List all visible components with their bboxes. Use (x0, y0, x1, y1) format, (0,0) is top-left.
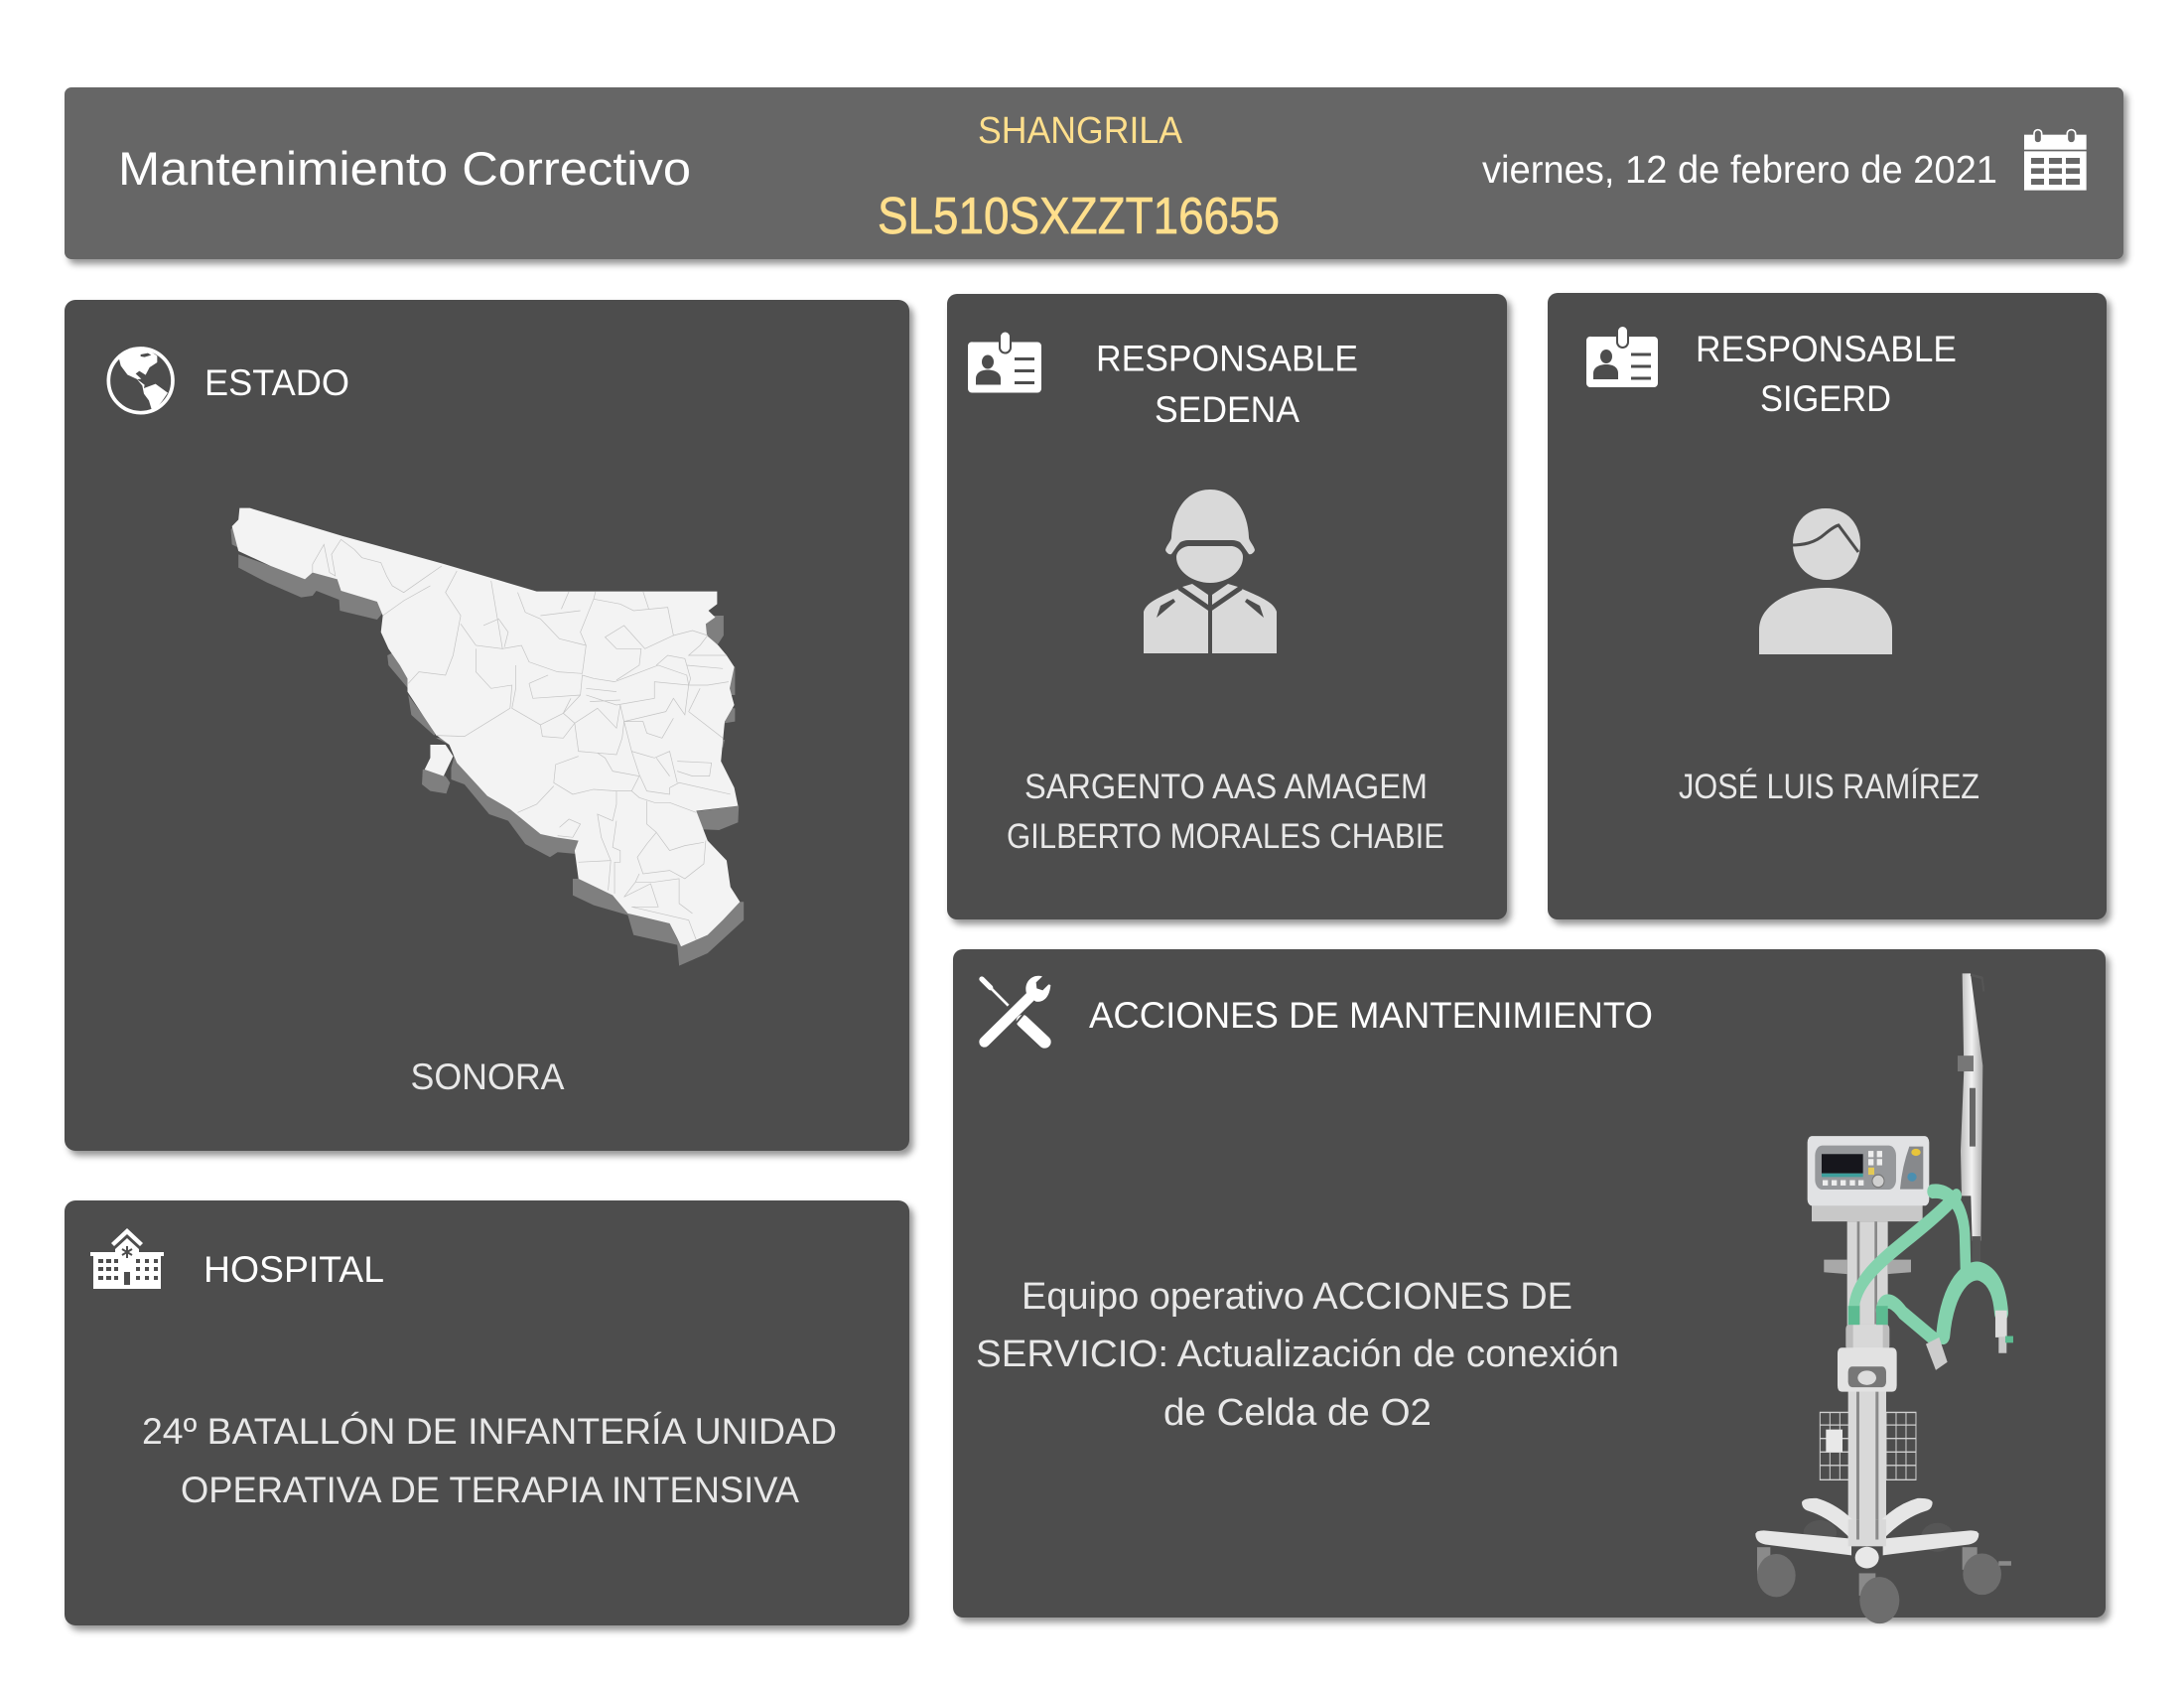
heading: responsable sedena: RESPONSABLE (1096, 338, 1358, 379)
municipal boundaries (313, 539, 731, 940)
text: maintenance description: de Celda de O2 (1163, 1392, 1432, 1434)
image: ventilator (1755, 973, 2013, 1623)
text: state name: SONORA (411, 1056, 565, 1097)
brand name: SHANGRILA (978, 110, 1183, 152)
hair line (1791, 525, 1858, 552)
text: maintenance description: Equipo operativo ACCIONES DE (1022, 1276, 1572, 1318)
icon: id badge (968, 332, 1041, 393)
head (1793, 508, 1860, 580)
text: maintenance description (976, 1276, 1619, 1434)
panel: responsable sigerd (1548, 293, 2107, 919)
title: Mantenimiento Correctivo (118, 142, 691, 195)
heading: responsable sigerd: RESPONSABLE (1696, 329, 1957, 369)
panel: hospital (65, 1200, 909, 1625)
map extruded shadow (231, 519, 744, 966)
icon: hospital building (90, 1228, 164, 1289)
icon: person (1759, 508, 1892, 654)
ventilator monitor (1812, 1202, 1923, 1221)
panel: acciones de mantenimiento (953, 949, 2106, 1623)
text: sedena name: GILBERTO MORALES CHABIE (1007, 817, 1444, 856)
face (1176, 546, 1243, 583)
ventilator breathing tubes (1853, 1192, 2001, 1340)
jacket right (1212, 589, 1277, 653)
icon: globe (108, 347, 173, 413)
text: hospital name: OPERATIVA DE TERAPIA INTENSIVA (181, 1470, 799, 1510)
shoulders (1759, 588, 1892, 654)
ventilator column (1847, 1221, 1888, 1327)
serial number: SL510SXZZT16655 (878, 188, 1280, 245)
helmet (1165, 490, 1255, 554)
header bar (65, 87, 2123, 259)
epaulettes (1157, 599, 1264, 618)
icon: soldier (1144, 490, 1277, 653)
panel: responsable sedena (947, 294, 1507, 919)
icon: wrench and screwdriver (982, 976, 1050, 1042)
ventilator humidifier (1845, 1325, 1889, 1350)
heading: responsable sedena (1096, 338, 1358, 430)
text: sigerd name: JOSÉ LUIS RAMÍREZ (1679, 768, 1979, 806)
icon: id badge (1586, 326, 1658, 387)
map: Sonora (231, 508, 744, 966)
heading: responsable sigerd (1696, 329, 1957, 419)
icon: calendar (2024, 130, 2087, 191)
map island (425, 745, 453, 776)
text: sedena name: SARGENTO AAS AMAGEM (1024, 768, 1428, 806)
ventilator baskets (1820, 1412, 1916, 1479)
jacket left (1144, 589, 1208, 653)
heading: hospital: HOSPITAL (204, 1249, 384, 1290)
heading: responsable sedena: SEDENA (1155, 389, 1299, 430)
panel: estado (65, 300, 909, 1151)
heading: responsable sigerd: SIGERD (1760, 378, 1891, 419)
text: hospital name: 24º BATALLÓN DE INFANTERÍA UNIDAD (142, 1411, 837, 1452)
ventilator wheeled base (1804, 1520, 1837, 1545)
collar (1182, 584, 1238, 605)
text: maintenance description: SERVICIO: Actualización de conexión (976, 1334, 1619, 1375)
date: viernes, 12 de febrero de 2021 (1482, 149, 1997, 192)
map landmass (232, 508, 740, 946)
text: sedena name (1007, 768, 1444, 856)
heading: acciones de mantenimiento: ACCIONES DE MANTENIMIENTO (1089, 995, 1653, 1036)
heading: estado: ESTADO (205, 362, 349, 403)
ventilator pole (1961, 973, 1982, 1241)
text: hospital name (142, 1411, 837, 1510)
